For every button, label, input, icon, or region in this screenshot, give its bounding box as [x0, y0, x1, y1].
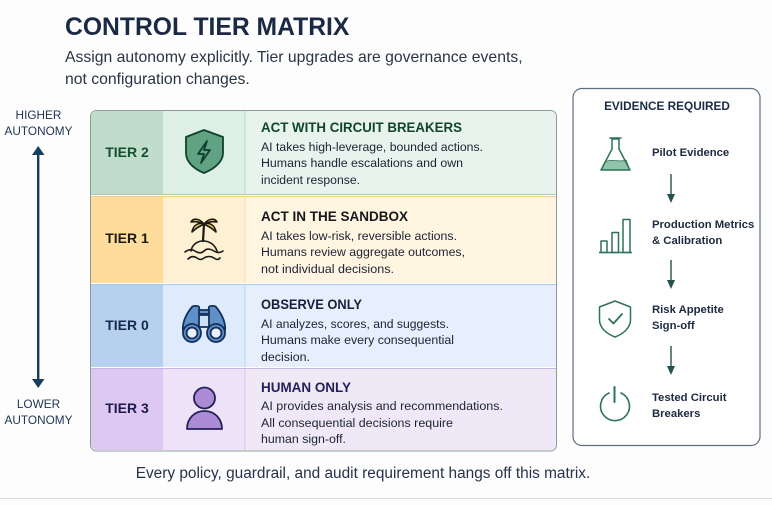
icon: bar chart: [599, 220, 632, 252]
tier text: AI takes low-risk, reversible actions.: [261, 229, 457, 243]
tier text: decision.: [261, 350, 310, 364]
subtitle: Assign autonomy explicitly. Tier upgrades are governance events,: [65, 49, 523, 66]
label: higher autonomy: AUTONOMY: [5, 124, 73, 138]
icon: power: [601, 387, 630, 421]
tier text: AI analyzes, scores, and suggests.: [261, 317, 449, 331]
tier text: Humans review aggregate outcomes,: [261, 245, 465, 259]
icon: shield check: [600, 301, 630, 337]
step label: [652, 304, 724, 332]
tier text: ACT WITH CIRCUIT BREAKERS: [261, 120, 462, 135]
tier label: TIER 3: [105, 400, 149, 416]
tier text: [261, 120, 483, 187]
icon: palm island: [185, 219, 223, 260]
subtitle: not configuration changes.: [65, 71, 250, 88]
step label: Sign-off: [652, 320, 695, 332]
tier text: [261, 297, 454, 364]
step label: [652, 219, 754, 247]
tier text: All consequential decisions require: [261, 416, 453, 430]
tier text: human sign-off.: [261, 432, 346, 446]
tier text: [261, 209, 465, 276]
step: production metrics: [599, 219, 754, 252]
label: lower autonomy: [5, 397, 73, 427]
step label: Tested Circuit: [652, 392, 727, 404]
label: lower autonomy: AUTONOMY: [5, 413, 73, 427]
tier text: HUMAN ONLY: [261, 380, 351, 395]
row: tier 3: [91, 368, 556, 450]
row: tier 1: [91, 196, 556, 283]
tier text: Humans make every consequential: [261, 333, 454, 347]
row: tier 2: [91, 111, 556, 195]
tier label: TIER 2: [105, 144, 149, 160]
icon: person: [187, 388, 222, 429]
step label: Production Metrics: [652, 219, 754, 231]
label: lower autonomy: LOWER: [17, 397, 60, 411]
tier text: AI provides analysis and recommendations.: [261, 399, 503, 413]
panel heading: EVIDENCE REQUIRED: [604, 99, 730, 113]
tier text: incident response.: [261, 173, 360, 187]
step label: Breakers: [652, 408, 700, 420]
panel: tier matrix: [90, 110, 556, 451]
step label: Risk Appetite: [652, 304, 724, 316]
tier text: OBSERVE ONLY: [261, 297, 362, 312]
title: CONTROL TIER MATRIX: [65, 14, 350, 41]
subtitle: [65, 49, 523, 88]
tier text: AI takes high-leverage, bounded actions.: [261, 140, 483, 154]
icon: binoculars: [183, 306, 225, 342]
row: tier 0: [91, 284, 556, 367]
footer statement: Every policy, guardrail, and audit requirement hangs off this matrix.: [136, 465, 590, 482]
arrow: autonomy scale: [32, 146, 44, 388]
tier text: [261, 380, 503, 446]
label: higher autonomy: HIGHER: [16, 108, 61, 122]
autonomy axis: [5, 108, 73, 427]
arrow: down: [667, 346, 675, 375]
tier text: ACT IN THE SANDBOX: [261, 209, 408, 224]
panel: evidence required: [573, 88, 760, 446]
arrow: down: [667, 174, 675, 203]
step: tested circuit breakers: [601, 387, 727, 421]
tier label: TIER 1: [105, 230, 149, 246]
step label: [652, 392, 727, 420]
step label: Pilot Evidence: [652, 147, 729, 159]
icon: shield with lightning bolt: [186, 130, 223, 173]
step label: & Calibration: [652, 235, 722, 247]
label: higher autonomy: [5, 108, 73, 138]
step: pilot evidence: [601, 138, 729, 170]
tier text: Humans handle escalations and own: [261, 156, 463, 170]
arrow: down: [667, 260, 675, 289]
step: risk appetite: [600, 301, 724, 337]
icon: flask: [601, 138, 630, 170]
tier text: not individual decisions.: [261, 262, 394, 276]
tier label: TIER 0: [105, 317, 149, 333]
